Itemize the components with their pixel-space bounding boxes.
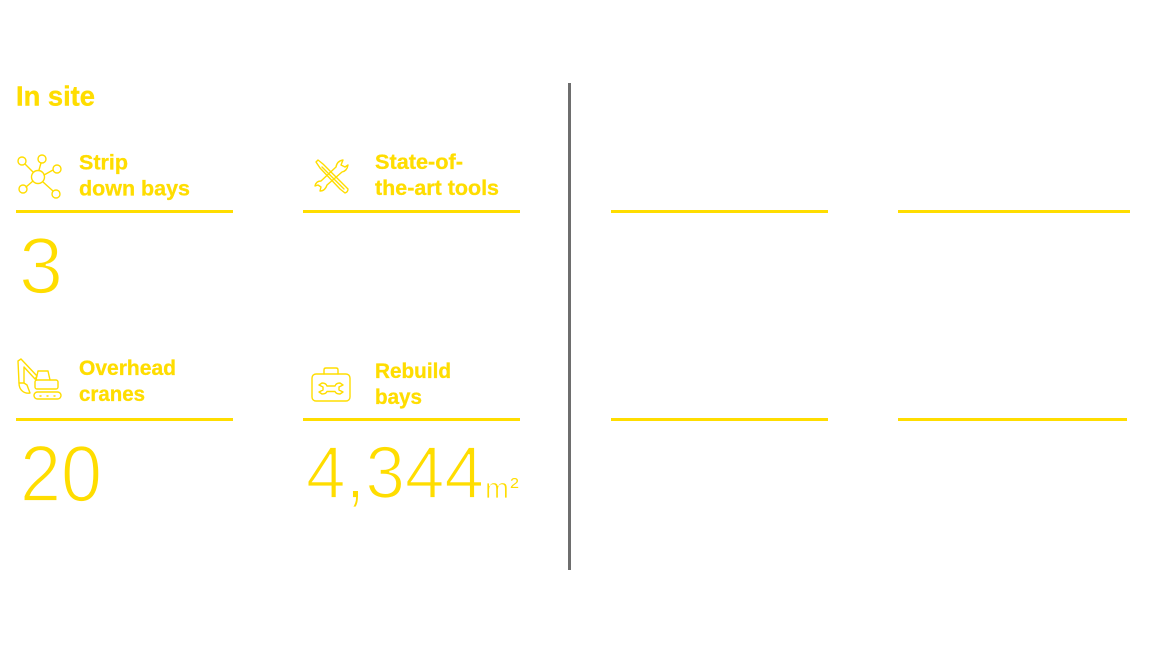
unit: square metres xyxy=(485,473,519,505)
rule: empty column 3, row 1 xyxy=(611,210,828,213)
panel: strip down bays xyxy=(18,152,190,310)
rule: state-of-the-art tools xyxy=(303,210,520,213)
label: strip down bays: down bays xyxy=(79,178,190,200)
label: state-of-the-art tools: State-of- xyxy=(375,151,463,174)
rule: rebuild bays xyxy=(303,418,520,421)
unit exponent 2: 2 xyxy=(510,475,519,492)
icon: network nodes xyxy=(18,155,61,198)
rule: empty column 4, row 1 xyxy=(898,210,1130,213)
label: rebuild bays: bays xyxy=(375,386,422,409)
panel: overhead cranes xyxy=(18,357,176,518)
icon: toolbox xyxy=(312,368,350,401)
label: overhead cranes: Overhead xyxy=(79,357,176,380)
value: 20: 20 xyxy=(20,429,102,518)
unit letter m: m xyxy=(485,473,509,505)
icon: excavator xyxy=(18,359,61,399)
label: rebuild bays: Rebuild xyxy=(375,360,451,383)
panel: rebuild bays xyxy=(306,360,519,514)
label: state-of-the-art tools: the-art tools xyxy=(375,177,499,200)
rule: strip down bays xyxy=(16,210,233,213)
rule: empty column 4, row 2 xyxy=(898,418,1127,421)
label: strip down bays: Strip xyxy=(79,152,128,174)
title: In site xyxy=(16,80,95,112)
value: 4,344: 4,344 xyxy=(306,431,484,514)
panel: state-of-the-art tools xyxy=(315,151,499,200)
label: overhead cranes: cranes xyxy=(79,383,145,406)
rule: overhead cranes xyxy=(16,418,233,421)
value: 3: 3 xyxy=(19,221,63,310)
icon: crossed wrench and screwdriver xyxy=(315,160,348,193)
rule: empty column 3, row 2 xyxy=(611,418,828,421)
central vertical divider xyxy=(568,83,571,570)
